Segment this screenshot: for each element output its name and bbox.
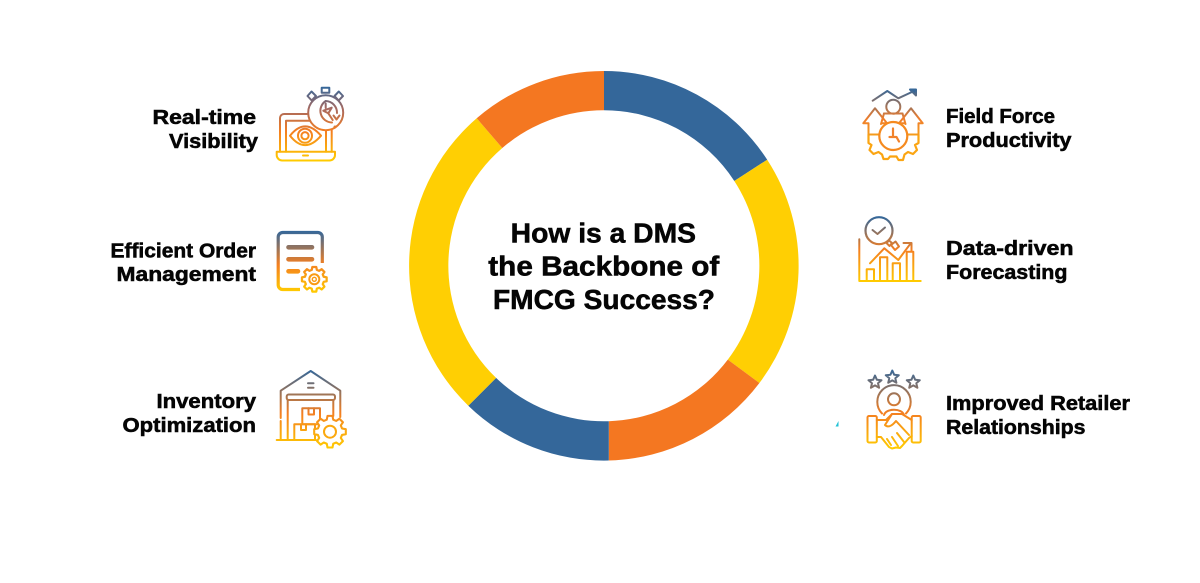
label: Improved Retailer Relationships: Improved Retailer	[946, 393, 1130, 415]
label: Data-driven Forecasting	[946, 238, 1074, 284]
ring segment: bottom-left blue	[468, 378, 609, 461]
label: Efficient Order Management: Efficient Order	[110, 240, 256, 262]
icon: field force productivity gear with arrows	[863, 90, 923, 160]
title: How is a DMS	[511, 217, 696, 248]
label: Real-time Visibility: Visibility	[169, 131, 259, 153]
ring segment: top-left orange	[477, 71, 604, 148]
title: FMCG Success?	[493, 284, 715, 315]
label: Real-time Visibility: Real-time	[152, 107, 256, 129]
icon: stars, person and handshake	[868, 370, 921, 448]
icon: magnifier over bar chart	[859, 217, 921, 281]
ring segment: top-right blue	[604, 71, 767, 181]
label: Inventory Optimization: Optimization	[122, 415, 256, 437]
label: Improved Retailer Relationships	[946, 393, 1130, 439]
label: Inventory Optimization	[122, 391, 257, 437]
label: Inventory Optimization: Inventory	[156, 391, 257, 413]
ring segment: right yellow	[728, 160, 799, 383]
label: Field Force Productivity	[946, 106, 1072, 152]
label: Data-driven Forecasting: Data-driven	[946, 238, 1074, 260]
icon: document with gear	[278, 232, 327, 292]
label: Efficient Order Management: Management	[116, 264, 256, 286]
donut ring	[409, 71, 799, 461]
title: the Backbone of	[488, 250, 720, 282]
small teal speck	[836, 421, 838, 426]
icon: laptop with eye and stopwatch	[277, 88, 343, 160]
title	[488, 217, 720, 315]
label: Real-time Visibility	[152, 107, 259, 153]
label: Data-driven Forecasting: Forecasting	[946, 262, 1068, 284]
label: Efficient Order Management	[110, 240, 256, 286]
ring segment: bottom-right orange	[609, 360, 759, 460]
label: Field Force Productivity: Productivity	[946, 130, 1072, 152]
icon: warehouse with boxes and gear	[277, 371, 346, 448]
label: Improved Retailer Relationships: Relationships	[946, 417, 1086, 439]
ring segment: left yellow	[409, 118, 502, 406]
label: Field Force Productivity: Field Force	[946, 106, 1055, 128]
